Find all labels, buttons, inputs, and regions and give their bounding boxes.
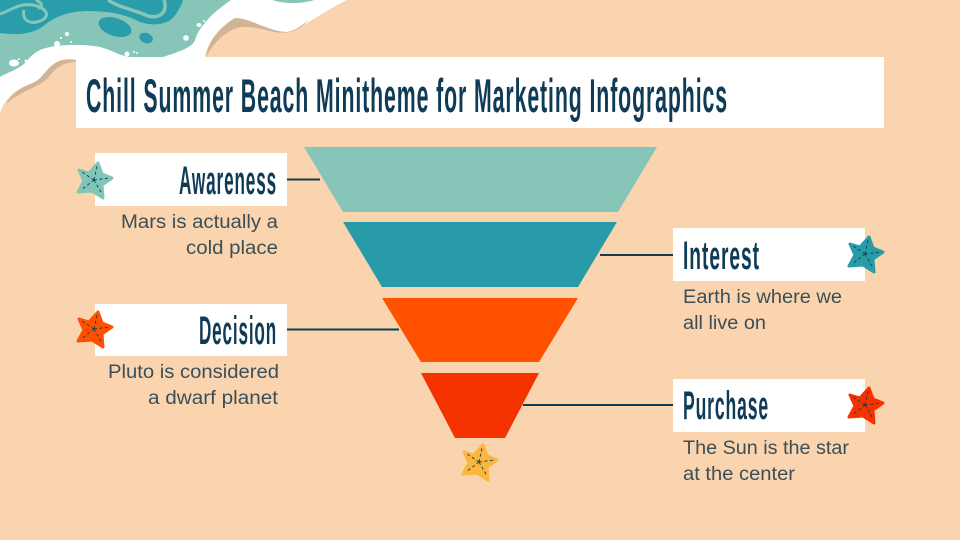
item: Purchase: Purchase xyxy=(683,384,769,428)
item: Awareness: Mars is actually a xyxy=(121,212,278,233)
icon: light teal star xyxy=(78,163,112,198)
foam xyxy=(0,0,347,113)
icon: yellow star xyxy=(463,445,497,480)
dark teal water xyxy=(0,0,183,34)
item: Interest: all live on xyxy=(683,313,766,334)
funnel chart xyxy=(304,147,657,438)
item: Decision xyxy=(78,304,399,409)
light teal water xyxy=(0,0,231,77)
funnel level 4 xyxy=(421,373,539,438)
icon: red star xyxy=(849,388,883,423)
funnel level 2 xyxy=(343,222,617,287)
icon: teal star xyxy=(849,237,883,272)
dark blobs xyxy=(96,13,134,41)
funnel level 3 xyxy=(382,298,578,362)
funnel level 1 xyxy=(304,147,657,212)
item: Awareness xyxy=(78,153,320,259)
item: Decision: Decision xyxy=(199,309,277,353)
item: Interest: Interest xyxy=(683,234,760,278)
item: Purchase: at the center xyxy=(683,464,796,485)
icon: orange star xyxy=(78,312,112,347)
item: Decision: a dwarf planet xyxy=(148,388,279,409)
item: Decision: Pluto is considered xyxy=(108,362,279,383)
item: Awareness: Awareness xyxy=(179,159,277,203)
item: Purchase xyxy=(523,379,883,485)
bubbles xyxy=(9,20,205,66)
item: Interest xyxy=(600,228,883,334)
beach waves corner xyxy=(0,0,347,113)
item: Purchase: The Sun is the star xyxy=(683,438,850,459)
item: Interest: Earth is where we xyxy=(683,287,842,308)
item: Awareness: cold place xyxy=(186,238,278,259)
swirls xyxy=(0,0,46,22)
title xyxy=(76,57,884,128)
wet sand shadow xyxy=(6,18,308,104)
far water patch xyxy=(272,0,314,3)
